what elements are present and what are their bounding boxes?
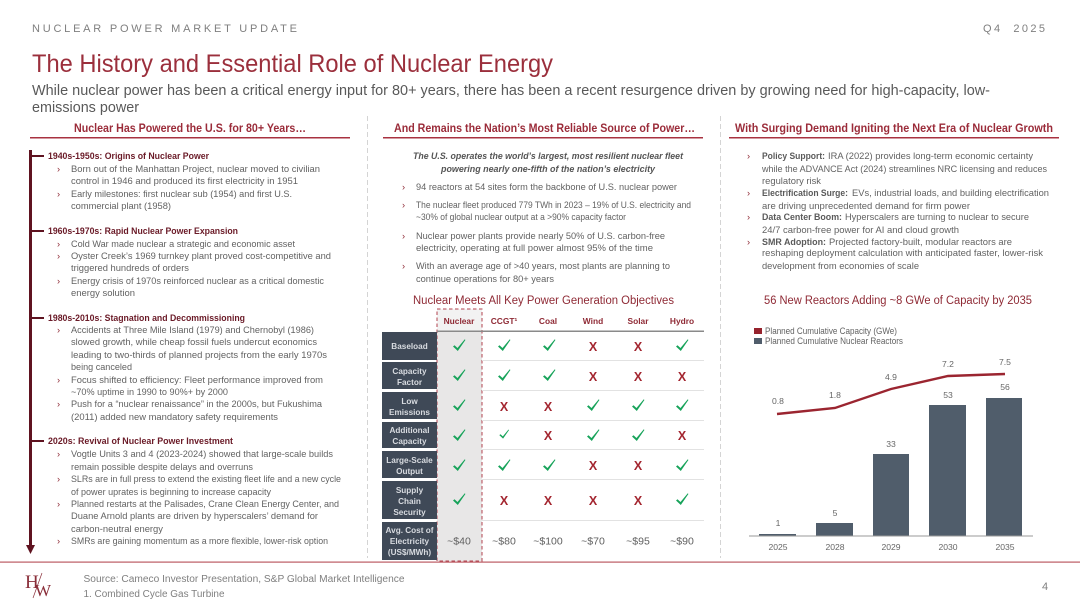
bullet: data center boom: 24/7 carbon-free power for AI and cloud growth xyxy=(762,225,959,235)
reactor labels: 56 xyxy=(1000,382,1010,392)
reactor labels: 1 xyxy=(776,518,781,528)
reactor labels: 33 xyxy=(886,439,896,449)
heading: column 2: And Remains the Nation’s Most Reliable Source of Power… xyxy=(394,123,695,135)
row: supply chain security marks: X xyxy=(589,494,598,508)
chart heading: new reactors: 56 New Reactors Adding ~8 GWe of Capacity by 2035 xyxy=(764,295,1032,307)
bullet: smr adoption: Projected factory-built, modular reactors are xyxy=(829,237,1012,247)
era: 1980s-2010s: leading to two-thirds of planned projects from the early 1970s xyxy=(71,350,327,360)
bullets: › xyxy=(402,182,405,192)
era: 1980s-2010s: ~70% uptime in 1990 to 90%+ by 2000 xyxy=(71,387,228,397)
row: supply chain security marks: X xyxy=(544,494,553,508)
capacity labels: 7.2 xyxy=(942,359,954,369)
era: 1960s-1970s: 1960s-1970s: Rapid Nuclear Power Expansion xyxy=(48,225,238,236)
bullet: smr adoption: development from economies of scale xyxy=(762,261,919,271)
capacity labels xyxy=(772,357,1011,406)
header label: NUCLEAR POWER MARKET UPDATE xyxy=(32,23,297,35)
chart: planned reactors and capacity xyxy=(749,326,1033,552)
bullets: › xyxy=(402,231,405,241)
era: 1960s-1970s: › xyxy=(57,276,60,286)
row labels: Additional xyxy=(389,426,430,435)
era: 1960s-1970s: energy solution xyxy=(71,288,135,298)
bullet: data center boom xyxy=(747,212,1029,235)
column headers: CCGT¹ xyxy=(491,316,517,326)
column headers: Solar xyxy=(628,316,649,326)
row: average cost values: ~$80 xyxy=(492,536,516,548)
era: 1940s-1950s: › xyxy=(57,164,60,174)
chart heading: objectives: Nuclear Meets All Key Power Generation Objectives xyxy=(413,295,674,307)
era: 2020s: SMRs are gaining momentum as a more flexible, lower-risk option xyxy=(71,536,328,546)
panel: reliability text xyxy=(402,150,691,284)
bullets: continue operations for 80+ years xyxy=(416,274,554,284)
title: The History and Essential Role of Nuclear Energy xyxy=(32,50,553,78)
era: 1960s-1970s: Oyster Creek’s 1969 turnkey plant proved cost-competitive and xyxy=(71,251,331,261)
capacity labels: 1.8 xyxy=(829,390,841,400)
era: 1960s-1970s: › xyxy=(57,239,60,249)
table lines xyxy=(437,330,704,521)
bullets: ~30% of global nuclear output at a >90% capacity factor xyxy=(416,212,626,222)
column headers: Nuclear xyxy=(444,316,475,326)
bullet: smr adoption xyxy=(747,237,1043,271)
bullet: policy support: IRA (2022) provides long-term economic certainty xyxy=(828,151,1033,161)
row labels: Large-Scale xyxy=(386,456,433,465)
era: 1980s-2010s: 1980s-2010s: Stagnation and Decommissioning xyxy=(48,312,245,323)
row: supply chain security marks: X xyxy=(500,494,509,508)
row: low emissions marks: X xyxy=(544,400,553,414)
reactor labels: 53 xyxy=(943,390,953,400)
row: large-scale output marks xyxy=(453,459,688,473)
bars xyxy=(759,398,1022,536)
era: 1980s-2010s: (2011) added new mandatory safety requirements xyxy=(71,412,278,422)
era: 1940s-1950s xyxy=(48,150,320,211)
era: 2020s: 2020s: Revival of Nuclear Power Investment xyxy=(48,435,233,446)
column headers: Hydro xyxy=(670,316,694,326)
panel: objectives table xyxy=(382,309,704,561)
timeline arrow xyxy=(26,150,44,554)
era: 2020s: remain possible despite delays and overruns xyxy=(71,462,253,472)
column dividers xyxy=(368,116,720,558)
row: average cost values: ~$95 xyxy=(626,536,650,548)
bullet: policy support: while the ADVANCE Act (2024) streamlines NRC licensing and reduces xyxy=(761,164,1047,174)
reactor labels: 5 xyxy=(833,508,838,518)
era: 1980s-2010s: › xyxy=(57,375,60,385)
row labels: Output xyxy=(396,467,423,476)
nuclear column highlight xyxy=(437,309,482,561)
row labels: Low xyxy=(401,397,418,406)
era: 2020s xyxy=(48,435,341,546)
year labels: 2035 xyxy=(995,542,1015,552)
era: 1960s-1970s: Energy crisis of 1970s reinforced nuclear as a critical domestic xyxy=(71,276,324,286)
icon: logo xyxy=(25,572,52,600)
era: 2020s: of power uprates is beginning to increase capacity xyxy=(71,487,271,497)
year labels: 2025 xyxy=(768,542,788,552)
bullets xyxy=(402,182,691,284)
row labels: Emissions xyxy=(389,408,430,417)
era: 2020s: › xyxy=(57,499,60,509)
capacity line xyxy=(777,374,1005,414)
axis xyxy=(749,536,1033,537)
row: average cost values: ~$40 xyxy=(447,536,471,548)
row: capacity factor marks: X xyxy=(589,370,598,384)
row: average cost values: ~$100 xyxy=(533,536,563,548)
row: capacity factor marks: X xyxy=(634,370,643,384)
era: 1980s-2010s: Accidents at Three Mile Island (1979) and Chernobyl (1986) xyxy=(71,325,314,335)
bullet: policy support: regulatory risk xyxy=(762,176,821,186)
bullets: › xyxy=(402,200,405,210)
source note: Source: Cameco Investor Presentation, S&P Global Market Intelligence xyxy=(84,574,405,585)
row: baseload marks: X xyxy=(634,340,643,354)
column headers: Wind xyxy=(583,316,603,326)
row labels: Supply xyxy=(396,486,424,495)
capacity labels: 7.5 xyxy=(999,357,1011,367)
era: 1980s-2010s: slowed growth, while cheap fossil fuels undercut economics xyxy=(71,337,317,347)
heading: column 3: With Surging Demand Igniting the Next Era of Nuclear Growth xyxy=(735,123,1053,135)
italic intro: powering nearly one-fifth of the nation’s electricity xyxy=(440,163,656,174)
era: 1940s-1950s: › xyxy=(57,189,60,199)
bullet: electrification surge: Electrification Surge: xyxy=(762,188,848,198)
year labels: 2028 xyxy=(825,542,845,552)
source note xyxy=(84,574,405,600)
era: 2020s: Planned restarts at the Palisades, Crane Clean Energy Center, and xyxy=(71,499,339,509)
row labels: Capacity xyxy=(392,367,427,376)
era: 2020s: › xyxy=(57,536,60,546)
row: additional capacity marks: X xyxy=(544,429,553,443)
row labels: Electricity xyxy=(390,537,430,546)
era: 1980s-2010s: Focus shifted to efficiency: Fleet performance improved from xyxy=(71,375,323,385)
legend: Planned Cumulative Capacity (GWe) xyxy=(765,326,897,336)
row: additional capacity marks: X xyxy=(678,429,687,443)
legend: Planned Cumulative Nuclear Reactors xyxy=(765,336,903,346)
era: 1940s-1950s: Early milestones: first nuclear sub (1954) and first U.S. xyxy=(71,189,292,199)
row: capacity factor marks xyxy=(453,369,687,384)
era: 1940s-1950s: control in 1946 and produced its first electricity in 1951 xyxy=(71,176,298,186)
era: 1980s-2010s xyxy=(48,312,327,422)
subtitle: emissions power xyxy=(32,100,139,116)
bullets: 94 reactors at 54 sites form the backbone of U.S. nuclear power xyxy=(416,182,677,192)
page number: 4 xyxy=(1042,581,1048,593)
row: average cost values: ~$70 xyxy=(581,536,605,548)
column headers xyxy=(444,316,694,326)
panel: timeline history xyxy=(48,150,341,546)
era: 1960s-1970s: Cold War made nuclear a strategic and economic asset xyxy=(71,239,295,249)
year labels xyxy=(768,542,1015,552)
row: supply chain security marks: X xyxy=(634,494,643,508)
row: large-scale output marks: X xyxy=(589,459,598,473)
era: 1980s-2010s: › xyxy=(57,399,60,409)
year labels: 2029 xyxy=(881,542,901,552)
row labels xyxy=(382,332,437,560)
bullet: electrification surge xyxy=(747,188,1049,211)
bullet: data center boom: Data Center Boom: xyxy=(762,212,842,222)
heading: column 1: Nuclear Has Powered the U.S. for 80+ Years… xyxy=(74,123,306,135)
row: additional capacity marks xyxy=(453,429,687,443)
reactor labels xyxy=(776,382,1010,528)
bullet: policy support xyxy=(747,151,1047,186)
bullet: policy support: Policy Support: xyxy=(762,151,825,161)
bullet: electrification surge: EVs, industrial loads, and building electrification xyxy=(852,188,1049,198)
era: 1960s-1970s xyxy=(48,225,331,298)
row: baseload marks: X xyxy=(589,340,598,354)
column headers: Coal xyxy=(539,316,557,326)
subtitle xyxy=(32,83,990,116)
row labels: (US$/MWh) xyxy=(388,548,431,557)
italic intro: The U.S. operates the world’s largest, most resilient nuclear fleet xyxy=(413,150,684,161)
era: 2020s: › xyxy=(57,474,60,484)
capacity labels: 4.9 xyxy=(885,372,897,382)
bullet: data center boom: › xyxy=(747,212,750,222)
row labels: Security xyxy=(393,508,426,517)
era: 1940s-1950s: commercial plant (1958) xyxy=(71,201,171,211)
icon: logo: W xyxy=(35,581,52,600)
row: low emissions marks: X xyxy=(500,400,509,414)
era: 2020s: Vogtle Units 3 and 4 (2023-2024) showed that large-scale builds xyxy=(71,449,333,459)
row labels: Avg. Cost of xyxy=(386,526,434,535)
footer rule xyxy=(0,562,1080,563)
bullets: The nuclear fleet produced 779 TWh in 2023 – 19% of U.S. electricity and xyxy=(416,200,691,210)
year labels: 2030 xyxy=(938,542,958,552)
row: average cost values: ~$90 xyxy=(670,536,694,548)
row: low emissions marks xyxy=(453,399,688,414)
row labels: Capacity xyxy=(392,437,427,446)
bullet: data center boom: Hyperscalers are turning to nuclear to secure xyxy=(845,212,1029,222)
bullets: › xyxy=(402,261,405,271)
era: 1960s-1970s: › xyxy=(57,251,60,261)
era: 2020s: Duane Arnold plants are driven by hyperscalers’ demand for xyxy=(71,511,318,521)
bullet: smr adoption: reshaping deployment calculation with anticipated faster, lower-risk xyxy=(762,248,1043,258)
era: 1980s-2010s: › xyxy=(57,325,60,335)
era: 2020s: › xyxy=(57,449,60,459)
quarter label: Q4 2025 xyxy=(983,23,1045,35)
subtitle: While nuclear power has been a critical energy input for 80+ years, there has been a recent resurgence driven by growing need for high-capacity, low- xyxy=(32,83,990,99)
bullets: electricity, operating at full power almost 95% of the time xyxy=(416,243,653,253)
bullet: electrification surge: › xyxy=(747,188,750,198)
row: capacity factor marks: X xyxy=(678,370,687,384)
legend xyxy=(754,326,903,346)
bullet: electrification surge: are driving unprecedented demand for firm power xyxy=(762,201,970,211)
bullets: Nuclear power plants provide nearly 50% of U.S. carbon-free xyxy=(416,231,665,241)
era: 2020s: SLRs are in full press to extend the existing fleet life and a new cycle xyxy=(71,474,341,484)
icon: logo: H xyxy=(25,572,39,593)
row labels: Chain xyxy=(398,497,421,506)
era: 1980s-2010s: Push for a “nuclear renaissance” in the 2000s, but Fukushima xyxy=(71,399,323,409)
bullet: policy support: › xyxy=(747,151,750,161)
row: average cost values xyxy=(447,536,694,548)
era: 1940s-1950s: Born out of the Manhattan Project, nuclear moved to civilian xyxy=(71,164,320,174)
italic intro xyxy=(413,150,684,174)
row: supply chain security marks xyxy=(453,493,688,508)
bullet: smr adoption: SMR Adoption: xyxy=(762,237,826,247)
era: 1980s-2010s: being canceled xyxy=(71,362,132,372)
row: large-scale output marks: X xyxy=(634,459,643,473)
bullets: With an average age of >40 years, most plants are planning to xyxy=(416,261,670,271)
row labels: Baseload xyxy=(391,342,428,351)
era: 1960s-1970s: triggered hundreds of orders xyxy=(71,263,189,273)
row: baseload marks xyxy=(453,339,688,354)
bullet: smr adoption: › xyxy=(747,237,750,247)
row labels: Factor xyxy=(397,378,423,387)
panel: demand drivers xyxy=(747,151,1049,271)
source note: 1. Combined Cycle Gas Turbine xyxy=(84,589,225,600)
era: 2020s: carbon-neutral energy xyxy=(71,524,163,534)
capacity labels: 0.8 xyxy=(772,396,784,406)
era: 1940s-1950s: 1940s-1950s: Origins of Nuclear Power xyxy=(48,150,209,161)
